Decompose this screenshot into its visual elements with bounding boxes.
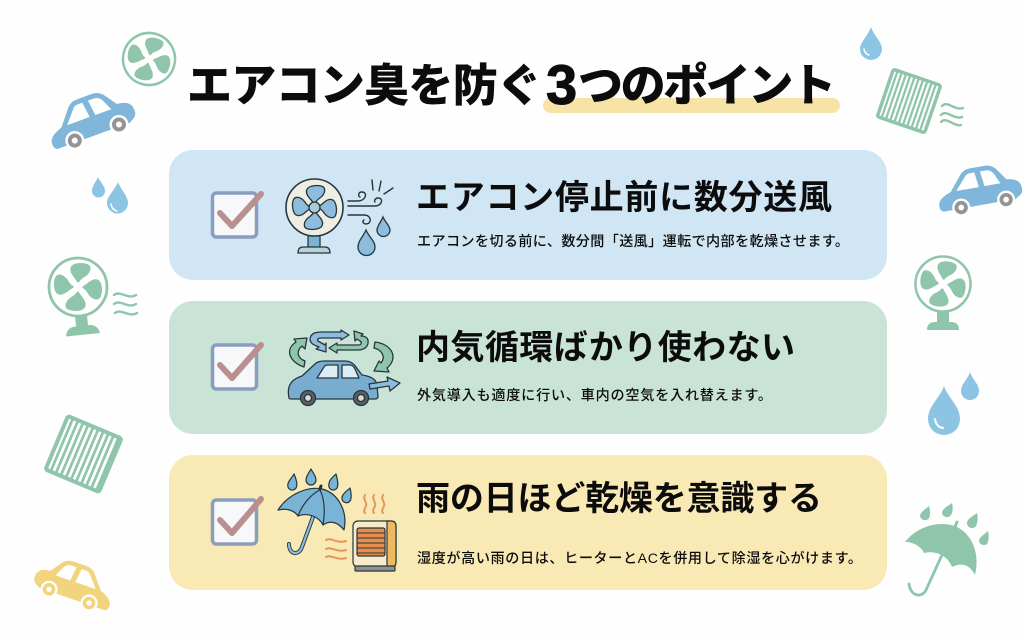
icon: checkbox 3 — [212, 499, 261, 544]
icon: air filter lower left — [46, 416, 121, 492]
heading 3: 雨の日ほど乾燥を意識する — [416, 480, 822, 518]
icon: green umbrella — [905, 503, 989, 595]
icon: checkbox 1 — [212, 193, 261, 237]
icon: decorative fan right — [916, 256, 970, 330]
heading 1: エアコン停止前に数分送風 — [416, 179, 832, 217]
title: つのポイント — [578, 60, 836, 111]
text 3: 湿度が高い雨の日は、ヒーターとACを併用して除湿を心がけます。 — [417, 550, 862, 566]
title: 3 — [546, 53, 577, 116]
icon: checkbox 2 — [212, 345, 261, 389]
heading 2: 内気循環ばかり使わない — [416, 329, 795, 367]
icon: wind waves left — [114, 294, 137, 314]
icon: desk fan with wind and drops — [286, 179, 393, 256]
icon: blue car top left — [41, 82, 141, 157]
icon: car with recirculation arrows — [288, 330, 400, 406]
icon: blue car right — [934, 160, 1024, 220]
icon: umbrella and heater — [278, 469, 396, 571]
title: エアコン臭を防ぐ — [187, 60, 542, 111]
icon: air filter top right — [877, 69, 941, 133]
icon: decorative fan top left — [117, 27, 181, 91]
panel: step 1 — [169, 150, 887, 280]
icon: wind waves top right — [941, 104, 963, 125]
text 1: エアコンを切る前に、数分間「送風」運転で内部を乾燥させます。 — [417, 233, 849, 249]
icon: decorative fan left — [46, 255, 112, 338]
panel: step 2 — [169, 301, 887, 434]
title — [187, 53, 840, 116]
icon: drops lower right — [928, 372, 979, 435]
icon: yellow car bottom left — [30, 551, 119, 618]
icon: drop top right — [860, 27, 882, 60]
icon: drops left — [92, 177, 128, 214]
panel: step 3 — [169, 455, 887, 590]
text 2: 外気導入も適度に行い、車内の空気を入れ替えます。 — [417, 387, 772, 403]
